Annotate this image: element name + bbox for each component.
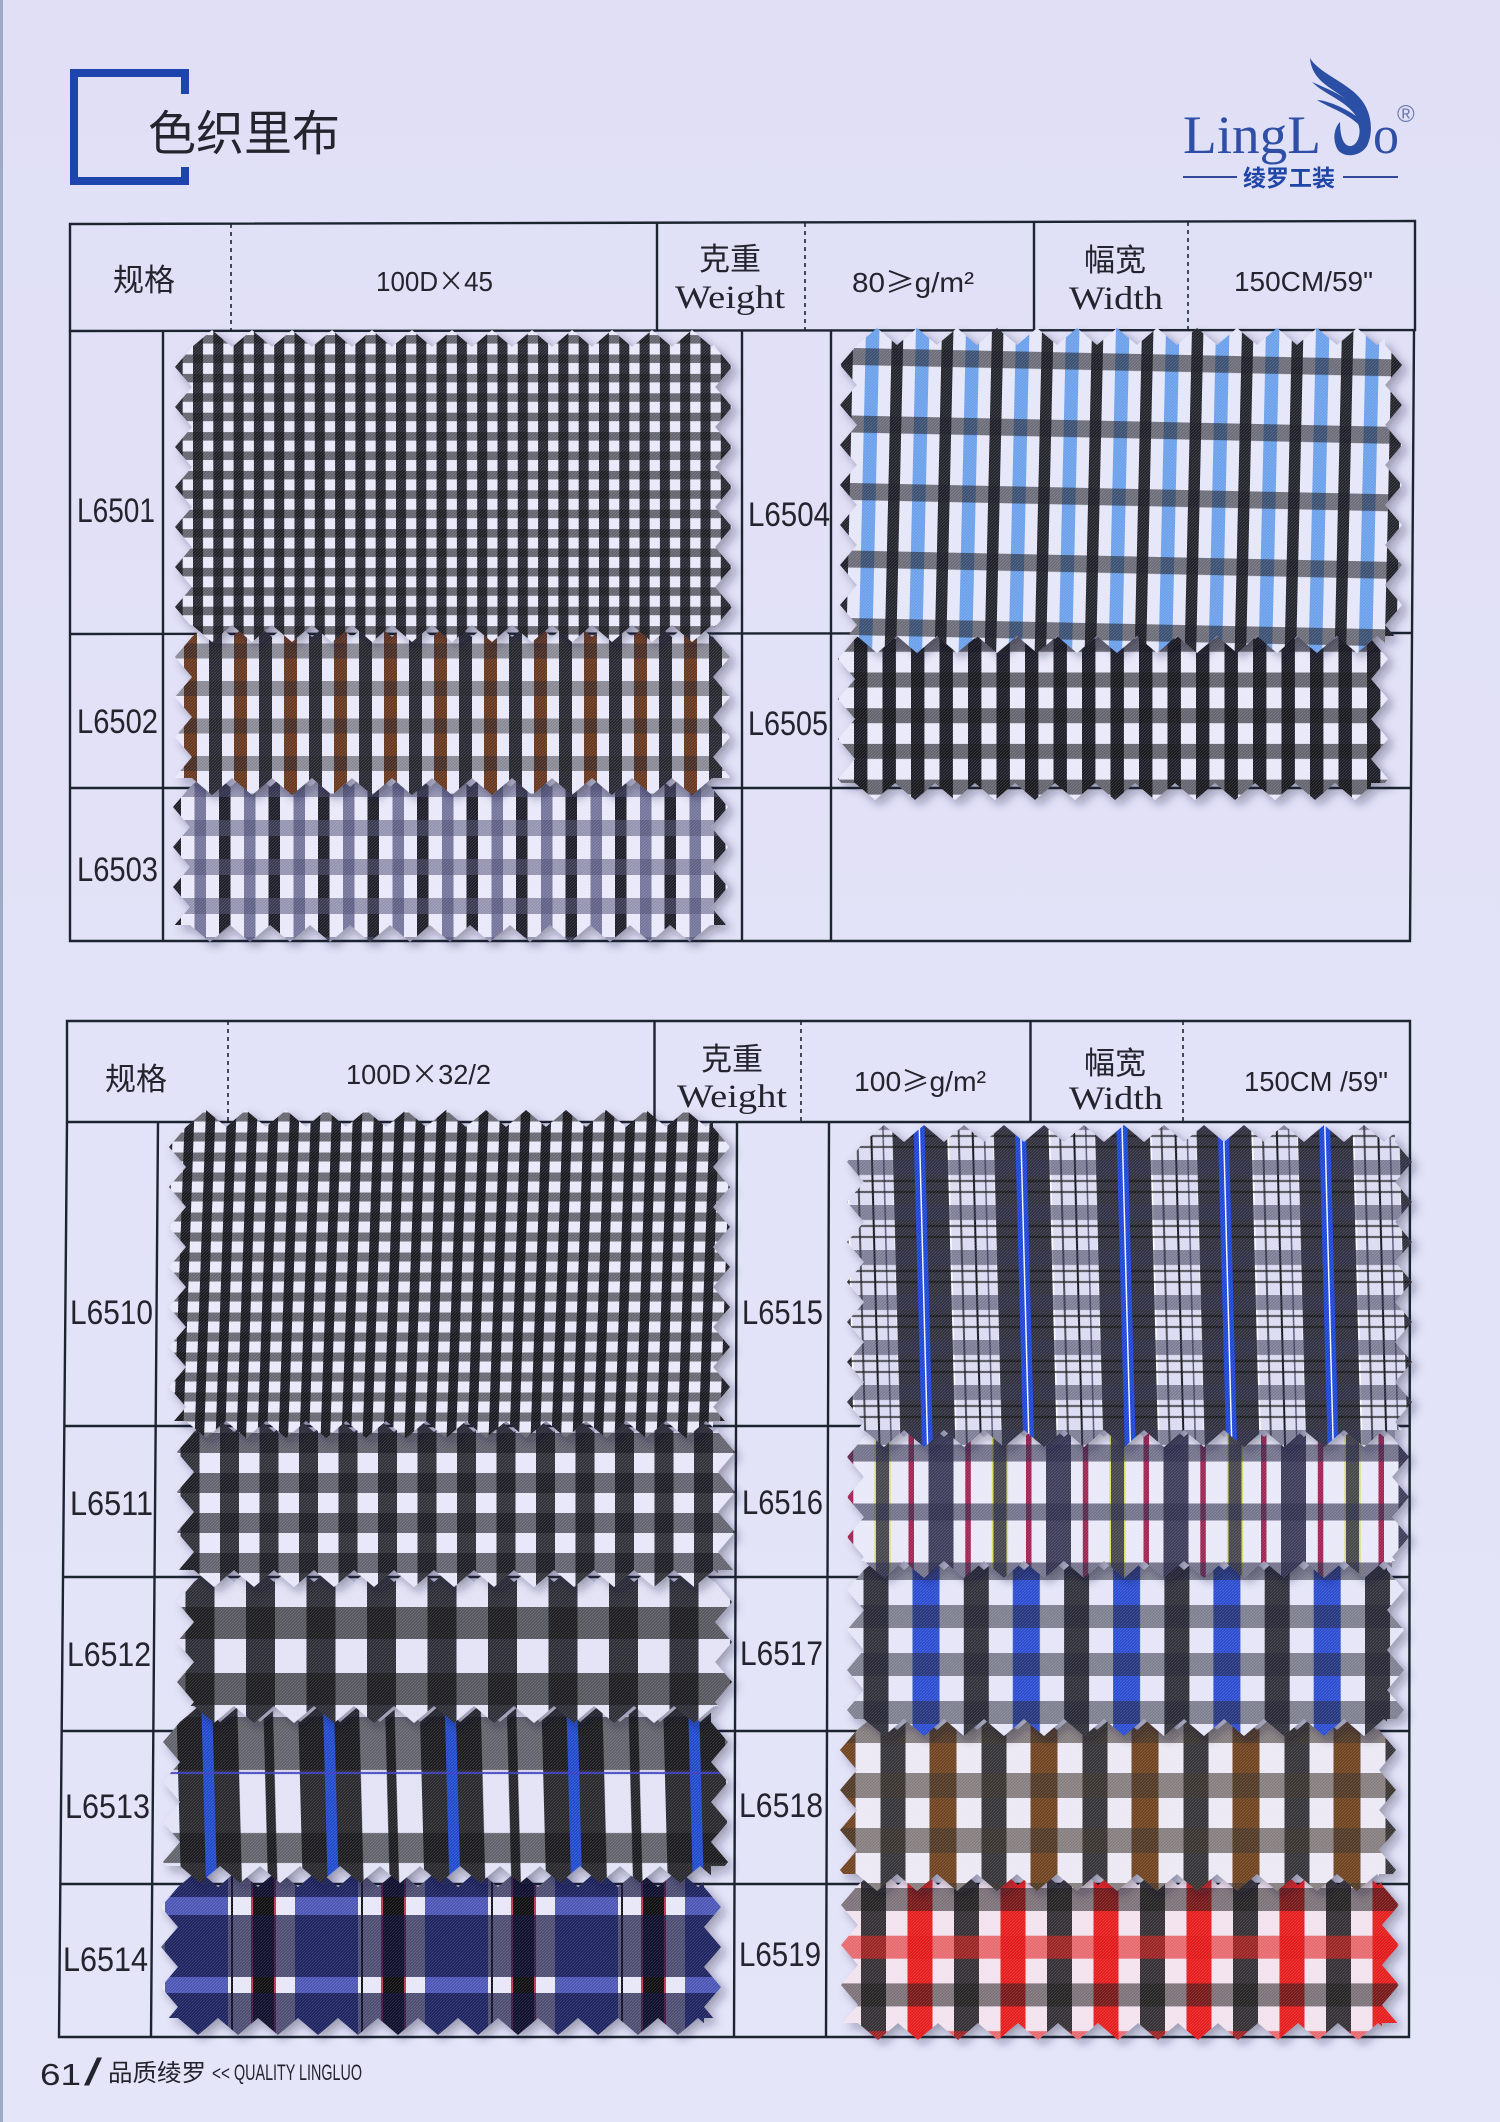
table 1 labels: L6503 [77,851,158,889]
table 1 header: Weight [675,280,785,316]
table 2 header: 克重 [701,1042,763,1077]
swatch: L6512 [177,1565,732,1723]
table 2 labels: L6517 [740,1635,823,1673]
logo wordmark: LingL [1183,105,1321,165]
table 1 header: 100D×45 [376,260,493,300]
swatch: L6516 [847,1420,1409,1578]
footer [40,2052,362,2094]
table 2 header: 规格 [105,1062,167,1097]
swatch: L6519 [841,1868,1399,2040]
swatch: L6510 [169,1110,730,1438]
table 1 header [113,242,1373,317]
swatch: L6518 [840,1713,1396,1891]
swatch: L6501 [175,330,732,642]
table 1 header: Width [1069,281,1164,317]
table 2 header [105,1042,1388,1117]
table 2 header: Weight [677,1079,787,1115]
table 1 labels: L6502 [77,703,158,741]
table 2 labels: L6513 [65,1788,150,1826]
swatch: L6511 [177,1415,735,1587]
swatch: L6514 [161,1870,721,2035]
table 1 labels: L6501 [77,492,155,530]
table 2 labels: L6512 [67,1636,151,1674]
swatch: L6513 [163,1705,728,1883]
icon: title bracket [74,73,185,181]
swatch: L6515 [847,1125,1412,1447]
table 2 labels: L6510 [70,1294,153,1332]
logo [1183,58,1415,191]
swatch: L6504 [840,328,1402,653]
registered mark: ® [1397,101,1415,128]
logo rule right [1343,176,1398,178]
logo rule left [1183,176,1237,178]
footer: / [84,2052,103,2094]
footer: QUALITY LINGLUO [234,2060,362,2085]
table 2 header: Width [1069,1081,1164,1117]
table 2 labels: L6515 [742,1294,823,1332]
swatch: L6503 [173,770,728,942]
table 2 header: 幅宽 [1084,1046,1146,1081]
table 1 header: 幅宽 [1084,243,1146,278]
table 1 labels: L6504 [748,496,830,534]
table 2 labels [63,1294,823,1979]
table 2 labels: L6516 [742,1484,823,1522]
logo letter o: o [1373,105,1399,165]
icon: wing [1310,58,1371,155]
table 2 labels: L6514 [63,1941,148,1979]
table 1 header: 克重 [699,242,761,277]
footer: << [212,2063,230,2085]
logo subtitle: 绫罗工装 [1243,165,1335,191]
table 1 grid [70,221,1415,941]
table 2 header: 100D×32/2 [346,1053,491,1093]
table 2 labels: L6511 [70,1485,153,1523]
table 2 header: 100≥g/m² [854,1060,986,1100]
table 1 header: 150CM/59" [1234,266,1373,297]
table 1 header: 80≥g/m² [852,261,974,301]
table 2 labels: L6519 [739,1936,821,1974]
table 2 labels: L6518 [739,1787,823,1825]
left page edge [0,0,3,2122]
swatch: L6505 [838,622,1388,800]
table 1 labels: L6505 [748,705,828,743]
table 2 grid [59,1021,1410,2037]
table 2 header: 150CM /59" [1244,1066,1388,1097]
footer: 品质绫罗 [108,2060,206,2087]
swatch: L6502 [175,620,730,795]
footer: 61 [40,2057,81,2092]
table 1 labels [77,492,830,889]
swatch: L6517 [847,1553,1404,1736]
title: 色织里布 [148,108,340,161]
table 1 header: 规格 [113,263,175,298]
